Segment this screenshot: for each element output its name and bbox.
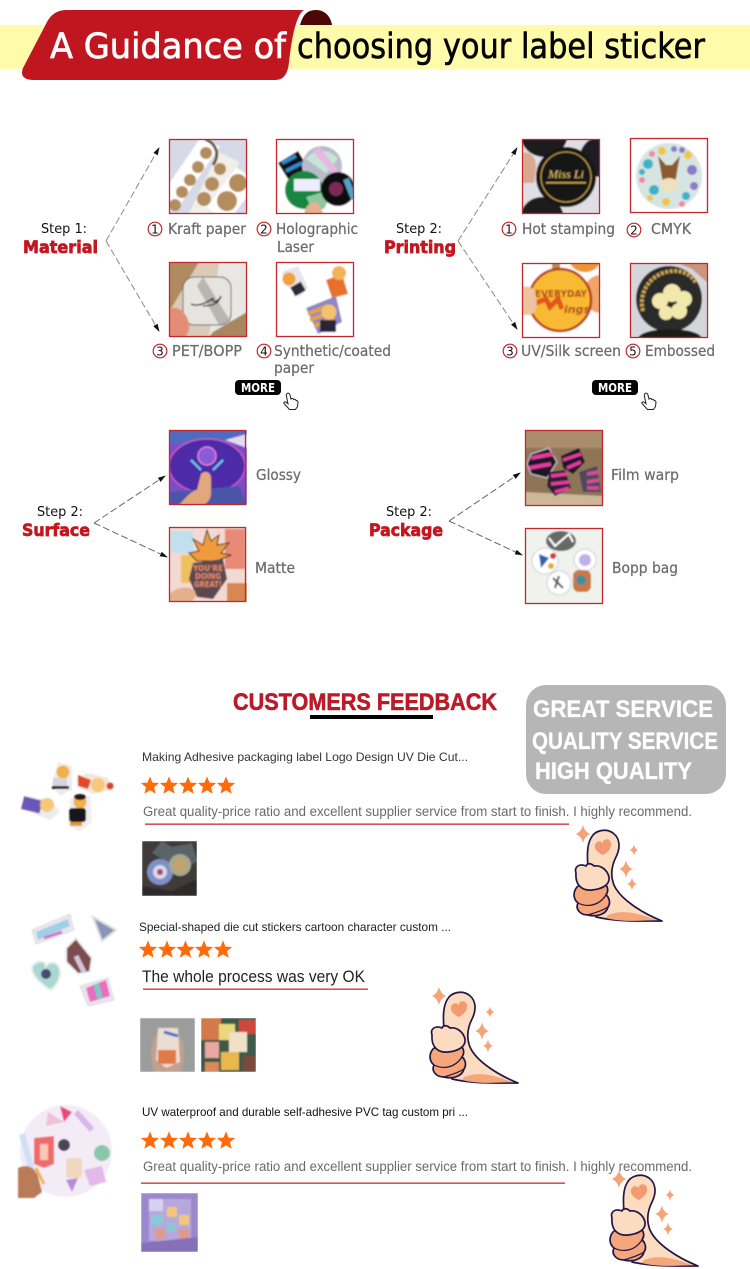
step heading: surface: Step 2: [37, 504, 83, 520]
label: Matte [255, 559, 295, 577]
step heading: package [369, 504, 443, 540]
option: synthetic/coated paper [257, 262, 391, 377]
option: uv/silk screen [503, 263, 621, 360]
step heading: material: Step 1: [41, 221, 87, 237]
section: surface [22, 430, 301, 602]
number 3: 3 [156, 344, 164, 358]
section: package [369, 430, 679, 604]
arrows: surface [94, 476, 167, 557]
step heading: printing: Printing [384, 238, 456, 257]
label: Holographic [276, 220, 358, 238]
rating stars [141, 1131, 235, 1149]
option: hot stamping [502, 109, 620, 241]
product title: UV waterproof and durable self-adhesive PVC tag custom pri ... [142, 1105, 468, 1119]
review text: Great quality-price ratio and excellent supplier service from start to finish. I highly recommend. [143, 1159, 692, 1174]
product photo: sticker collage [18, 1105, 112, 1198]
step heading: printing: Step 2: [396, 221, 442, 237]
review photo 2 [201, 1018, 256, 1072]
step heading: package: Package [369, 521, 443, 540]
icon: thumbs up [610, 1170, 698, 1266]
number 3: 3 [506, 344, 514, 358]
option: glossy [169, 430, 301, 505]
review photo 1 [140, 1018, 195, 1072]
number 5: 5 [629, 344, 637, 358]
step heading: material [23, 221, 98, 257]
option: film warp [525, 430, 679, 506]
product title: Special-shaped die cut stickers cartoon character custom ... [139, 920, 451, 934]
option: matte [169, 527, 295, 602]
more button: material [235, 380, 298, 410]
label: Glossy [256, 466, 301, 484]
product photo: bear stickers [21, 762, 114, 832]
step heading: material: Material [23, 238, 98, 257]
option: hot stamping: Miss Li [547, 167, 584, 181]
review text: The whole process was very OK [142, 968, 365, 986]
product title: Making Adhesive packaging label Logo Design UV Die Cut... [142, 750, 468, 764]
arrows: package [449, 473, 522, 555]
label: Synthetic/coated [274, 342, 391, 360]
option: cmyk [627, 138, 708, 238]
option: matte: GREAT! [194, 580, 222, 589]
section: material [23, 139, 391, 410]
option: pet/bopp [153, 262, 247, 360]
review 3 [18, 1105, 698, 1266]
option: matte: DOING [195, 572, 221, 581]
option: uv/silk screen: ings [564, 303, 590, 316]
step heading: surface [22, 504, 90, 540]
step heading: package: Step 2: [386, 504, 432, 520]
label [274, 342, 391, 377]
badge: service claims [526, 685, 726, 794]
number 1: 1 [151, 222, 159, 236]
label [276, 220, 358, 256]
review 2 [32, 914, 518, 1083]
more button: printing: MORE [598, 381, 632, 395]
label: paper [274, 359, 315, 377]
arrows: material [106, 148, 159, 331]
rating stars [141, 776, 235, 794]
option: uv/silk screen: EVERYDAY [535, 289, 587, 300]
title: white part: A Guidance of [50, 27, 287, 67]
number 2: 2 [630, 224, 638, 238]
number 2: 2 [260, 222, 268, 236]
label: Embossed [645, 342, 715, 360]
badge: service claims: GREAT SERVICE [533, 696, 713, 723]
review photo [141, 1193, 198, 1252]
label: Hot stamping [522, 220, 615, 238]
heading: customers feedback: CUSTOMERS FEEDBACK [233, 689, 497, 716]
section: printing [384, 109, 715, 410]
rating stars [139, 940, 232, 958]
review photo [142, 841, 197, 896]
option: matte: YOU'RE [192, 564, 223, 573]
option: kraft paper [148, 139, 247, 238]
option: embossed [626, 263, 715, 360]
badge: service claims: HIGH QUALITY [535, 758, 692, 785]
step heading: surface: Surface [22, 521, 90, 540]
label: Kraft paper [168, 220, 247, 238]
label: Laser [277, 238, 315, 256]
more button: printing [592, 380, 656, 410]
label: CMYK [651, 220, 692, 238]
icon: thumbs up [574, 825, 662, 921]
product photo: die cut stickers [32, 914, 116, 1006]
label: Bopp bag [612, 559, 678, 577]
icon: thumbs up [430, 987, 518, 1083]
label: UV/Silk screen [521, 342, 621, 360]
label: PET/BOPP [172, 342, 242, 360]
step heading: printing [384, 221, 456, 257]
badge: service claims: QUALITY SERVICE [532, 728, 718, 755]
review 1 [21, 750, 692, 921]
label: Film warp [611, 466, 679, 484]
number 1: 1 [505, 222, 513, 236]
number 4: 4 [260, 344, 268, 358]
arrows: printing [458, 148, 517, 329]
option: holographic laser [257, 139, 358, 256]
title banner [0, 10, 750, 80]
more button: material: MORE [241, 381, 275, 395]
review text: Great quality-price ratio and excellent supplier service from start to finish. I highly recommend. [143, 804, 692, 819]
option: bopp bag [525, 528, 678, 604]
